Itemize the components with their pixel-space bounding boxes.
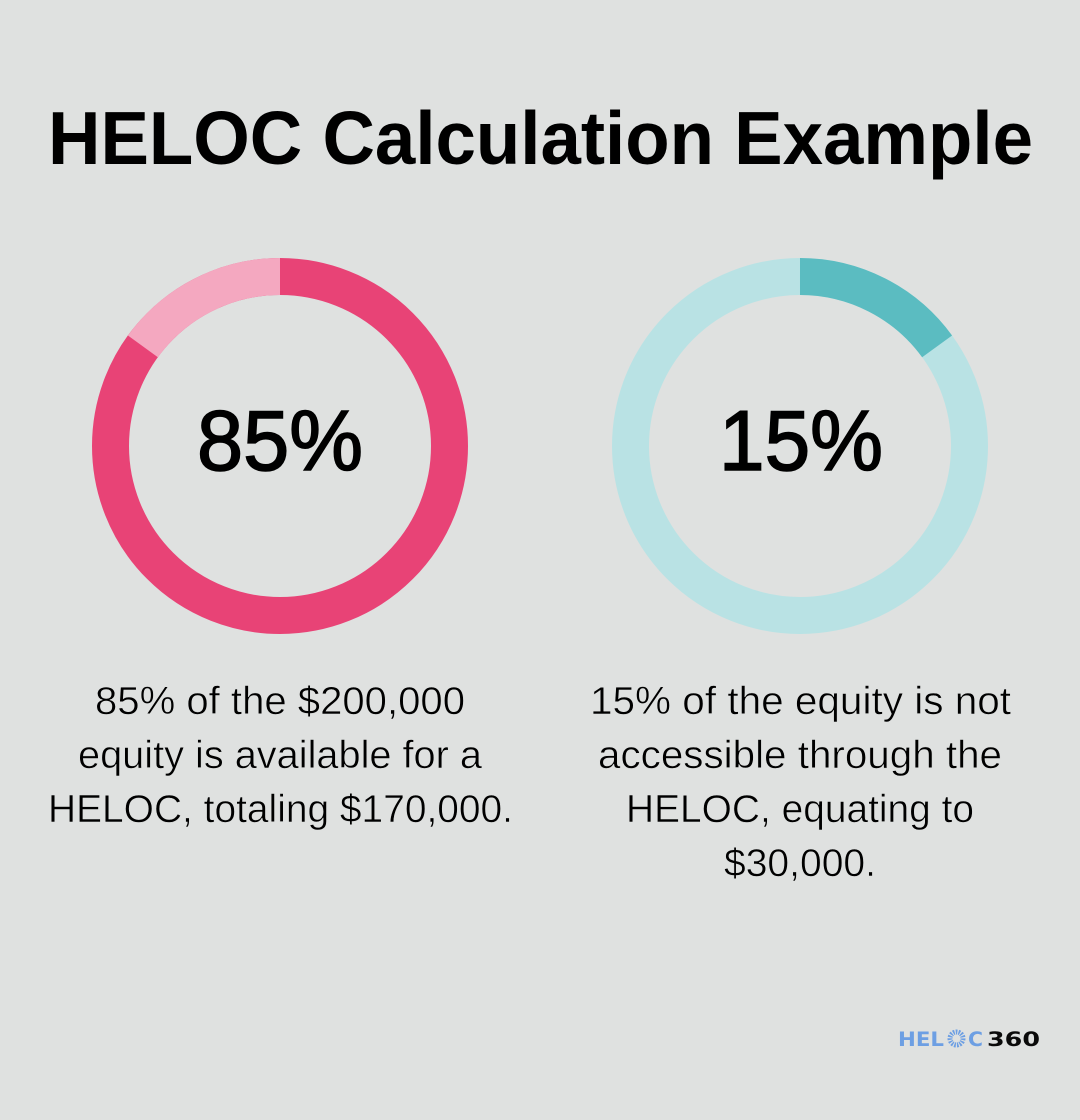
- logo: HELOC360: 360: [987, 1028, 1040, 1051]
- description: 85%: equity is available for a: [78, 734, 482, 777]
- donut chart: 15%: [630, 276, 970, 616]
- value: 85%: 85%: [197, 394, 363, 489]
- logo: HELOC360: C: [968, 1028, 983, 1051]
- description: 15%: 15% of the equity is not: [590, 680, 1011, 723]
- title: HELOC Calculation Example: [48, 96, 1033, 180]
- description: 85%: HELOC, totaling $170,000.: [48, 788, 513, 831]
- panel: 85% available: [48, 276, 513, 831]
- logo: HELOC360: [898, 1028, 1040, 1051]
- description: 15%: [590, 680, 1011, 885]
- donut chart: 85%: [110, 276, 450, 616]
- description: 15%: HELOC, equating to: [626, 788, 974, 831]
- description: 85%: [48, 680, 513, 831]
- value: 15%: 15%: [719, 394, 883, 489]
- description: 15%: accessible through the: [598, 734, 1002, 777]
- description: 85%: 85% of the $200,000: [95, 680, 465, 723]
- logo: HELOC360: HEL: [898, 1028, 944, 1051]
- panel: 15% not accessible: [590, 276, 1011, 885]
- description: 15%: $30,000.: [724, 842, 876, 885]
